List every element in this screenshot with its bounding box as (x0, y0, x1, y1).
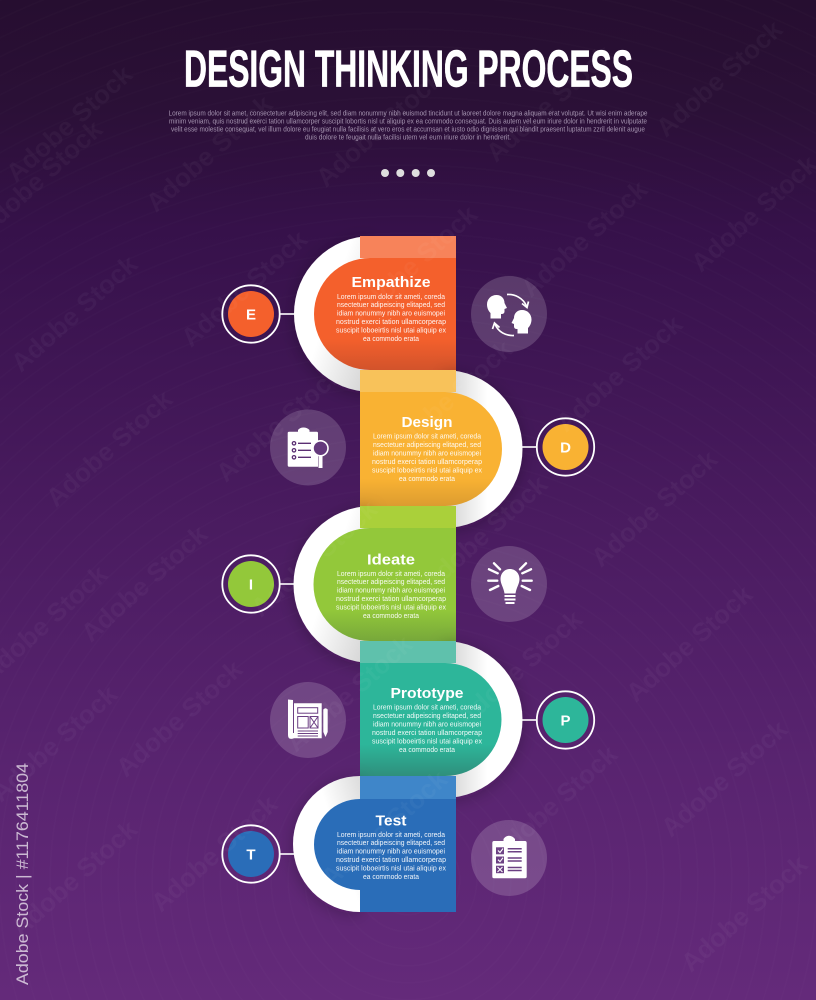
body: ideate: nostrud exerci tation ullamcorperap (336, 594, 446, 603)
body: design: nostrud exerci tation ullamcorperap (372, 457, 482, 466)
body: test (336, 830, 446, 881)
body: prototype: nsectetuer adipeiscing elitaped, sed (373, 711, 481, 720)
watermark grid: Adobe Stock (0, 59, 138, 188)
watermark grid: Adobe Stock (655, 714, 793, 843)
body: prototype: ea commodo erata (399, 745, 456, 754)
body: ideate: nsectetuer adipeiscing elitaped, sed (337, 577, 445, 586)
watermark grid: Adobe Stock (245, 494, 383, 623)
panel: empathize (294, 236, 456, 392)
watermark grid: Adobe Stock (140, 89, 278, 218)
watermark grid: Adobe Stock (485, 739, 623, 868)
body: design: Lorem ipsum dolor sit ameti, coreda (373, 432, 482, 441)
badge: P (521, 691, 594, 749)
intro paragraph: Lorem ipsum dolor sit amet, consectetuer adipiscing elit, sed diam nonummy nibh euismod tincidunt ut laoreet dolore magna aliquam erat volutpat. Ut wisi enim aderape (168, 109, 648, 118)
watermark grid: Adobe Stock (550, 309, 688, 438)
body: prototype: suscipit loboeirtis nisl utai aliquip ex (372, 736, 482, 745)
badge: D: D (560, 440, 571, 456)
body: ideate: suscipit loboeirtis nisl utai aliquip ex (336, 603, 446, 612)
body: design: suscipit loboeirtis nisl utai aliquip ex (372, 465, 482, 474)
badge: P: P (560, 712, 571, 730)
panel: prototype (360, 641, 522, 798)
watermark grid: Adobe Stock (5, 814, 143, 943)
intro paragraph: velit esse molestie consequat, vel illum dolore eu feugiat nulla facilisis at vero eros et accumsan et iusto odio dignissim qui blandit praesent luptatum zzril delenit augue (171, 125, 645, 134)
watermark grid: Adobe Stock (145, 789, 283, 918)
watermark grid: Adobe Stock (650, 14, 788, 143)
body: ideate: Lorem ipsum dolor sit ameti, coreda (337, 569, 446, 578)
watermark grid: Adobe Stock (40, 384, 178, 513)
body: prototype: Lorem ipsum dolor sit ameti, coreda (373, 702, 482, 712)
body: ideate (336, 569, 446, 620)
body: test: nsectetuer adipeiscing elitaped, sed (337, 838, 445, 847)
heading: empathize: Empathize (352, 275, 430, 291)
watermark grid: Adobe Stock (210, 359, 348, 488)
pagination dots (381, 169, 435, 177)
body: empathize: Lorem ipsum dolor sit ameti, coreda (337, 292, 446, 301)
body: design (372, 432, 482, 483)
watermark grid: Adobe Stock (175, 224, 313, 353)
body: empathize: nostrud exerci tation ullamcorperap (336, 317, 446, 326)
body: design: idiam nonummy nibh aro euismopei (373, 448, 481, 457)
body: empathize: ea commodo erata (363, 334, 420, 343)
intro paragraph (168, 109, 648, 142)
watermark grid: Adobe Stock (345, 199, 483, 328)
heading: test: Test (376, 813, 407, 829)
body: prototype (372, 702, 482, 754)
watermark grid: Adobe Stock (585, 444, 723, 573)
icon: blueprint and pencil (270, 682, 346, 758)
watermark grid: Adobe Stock (620, 579, 758, 708)
badge: T: T (246, 846, 256, 864)
watermark grid: Adobe Stock (480, 39, 618, 168)
watermark grid: Adobe Stock (5, 249, 143, 378)
body: test: Lorem ipsum dolor sit ameti, coreda (337, 830, 446, 839)
body: prototype: idiam nonummy nibh aro euismopei (373, 719, 481, 728)
body: test: nostrud exerci tation ullamcorperap (336, 855, 446, 864)
watermark grid: Adobe Stock (110, 654, 248, 783)
panel: ideate (294, 506, 456, 663)
watermark grid: Adobe Stock (380, 334, 518, 463)
heading: ideate: Ideate (367, 553, 415, 569)
panel: test (293, 776, 456, 912)
stock id side label: Adobe Stock | #1176411804 (13, 763, 32, 985)
icon: light bulb (471, 546, 547, 622)
body: design: nsectetuer adipeiscing elitaped, sed (373, 440, 481, 449)
body: design: ea commodo erata (399, 474, 456, 483)
icon: clipboard with magnifier (270, 410, 346, 486)
badge: D (521, 418, 594, 476)
watermark grid: Adobe Stock (315, 764, 453, 893)
watermark grid: Adobe Stock (675, 849, 813, 978)
body: empathize (336, 292, 446, 343)
intro paragraph: minim veniam, quis nostrud exerci tation ullamcorper suscipit lobortis nisl ut aliquip ex ea commodo consequat. Duis autem vel eum iriure dolor in hendrerit in vulputate (169, 117, 647, 126)
body: ideate: idiam nonummy nibh aro euismopei (337, 586, 445, 595)
badge: T (222, 825, 295, 883)
body: empathize: idiam nonummy nibh aro euismopei (337, 309, 445, 318)
body: empathize: suscipit loboeirtis nisl utai aliquip ex (336, 326, 446, 334)
intro paragraph: duis dolore te feugait nulla facilisi utem vel eum iriure dolor in hendrerit. (305, 133, 511, 142)
badge: I (222, 555, 295, 613)
watermark grid: Adobe Stock (415, 469, 553, 598)
watermark grid: Adobe Stock (75, 519, 213, 648)
body: test: suscipit loboeirtis nisl utai aliquip ex (336, 864, 446, 873)
badge: E: E (246, 306, 256, 324)
icon: checklist clipboard (471, 820, 547, 896)
watermark grid: Adobe Stock (515, 174, 653, 303)
body: empathize: nsectetuer adipeiscing elitaped, sed (337, 300, 445, 309)
heading: design: Design (402, 415, 452, 431)
watermark grid: Adobe Stock (450, 604, 588, 733)
body: test: ea commodo erata (363, 872, 420, 881)
body: prototype: nostrud exerci tation ullamcorperap (372, 728, 482, 737)
badge: E (222, 285, 295, 343)
badge: I: I (249, 576, 253, 594)
watermark grid: Adobe Stock (310, 64, 448, 193)
panel: design (360, 370, 522, 528)
heading: prototype: Prototype (390, 686, 464, 702)
icon: two heads with cycle arrows (471, 276, 547, 352)
body: ideate: ea commodo erata (363, 611, 420, 620)
body: test: idiam nonummy nibh aro euismopei (337, 847, 445, 856)
watermark grid: Adobe Stock (280, 629, 418, 758)
